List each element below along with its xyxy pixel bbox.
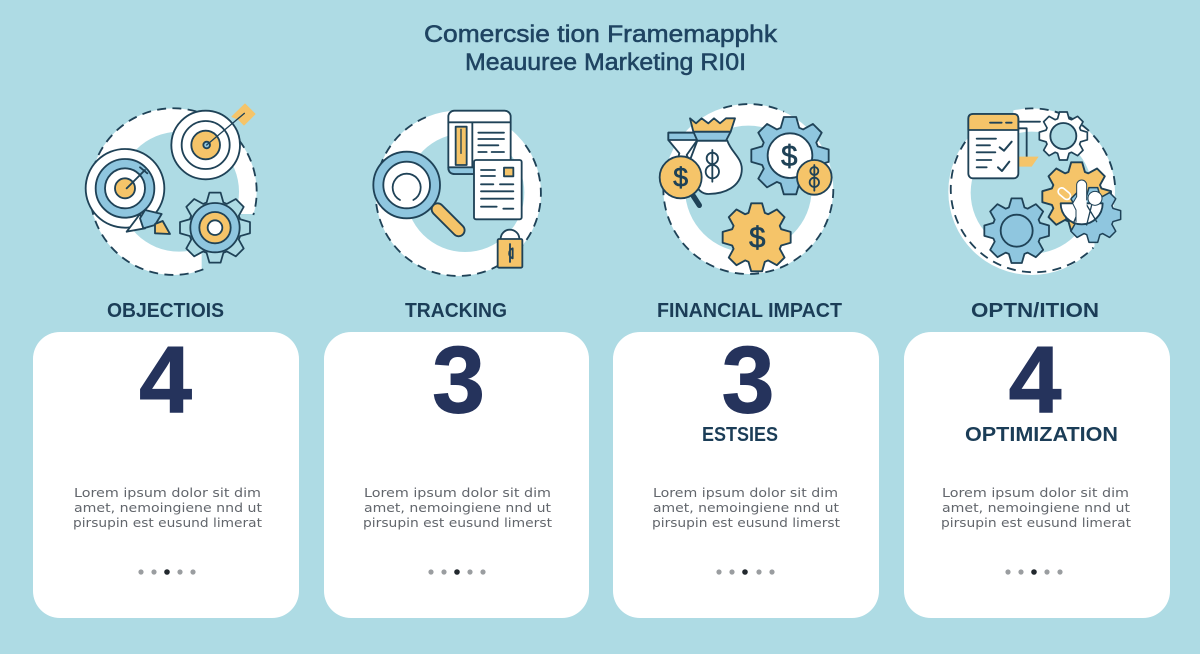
panel: financial impact card: [613, 328, 879, 618]
title: [424, 21, 778, 76]
gear: [180, 193, 250, 263]
title: Meauuree Marketing RI0I: [465, 49, 746, 76]
white gear: [1039, 112, 1087, 160]
body text: amet, nemoingiene nnd ut: [653, 500, 839, 515]
number: 4: [139, 328, 192, 434]
sublabel: ESTSIES: [702, 424, 778, 446]
body text: [941, 485, 1131, 530]
body text: [73, 485, 262, 530]
money bag: back: [668, 133, 697, 175]
target: upper right: [171, 104, 255, 179]
panel: objectives card: [33, 328, 299, 618]
title: Comercsie tion Framemapphk: [424, 21, 778, 48]
blue gear: [984, 198, 1049, 263]
orange gear with dollar: $: [749, 221, 765, 254]
heading: tracking: TRACKING: [405, 300, 507, 322]
sublabel: OPTIMIZATION: [965, 424, 1118, 446]
body text: amet, nemoingiene nnd ut: [74, 500, 262, 515]
pagination dots: [1005, 569, 1063, 575]
pagination dots: [716, 569, 775, 575]
body text: [363, 485, 552, 530]
coin with dollar: [660, 156, 702, 205]
body text: Lorem ipsum dolor sit dim: [74, 485, 261, 500]
gear with dollar: $: [781, 140, 797, 173]
body text: pirsupin est eusund limerat: [941, 515, 1131, 530]
icon: checklist and gears: [945, 107, 1133, 275]
pagination dots: [138, 569, 196, 575]
pagination dots: [428, 569, 486, 575]
checklist: [968, 114, 1040, 178]
heading: financial impact: FINANCIAL IMPACT: [657, 300, 842, 322]
orange and blue gears with hand: [1042, 162, 1121, 242]
icon: targets and gear: [86, 104, 268, 280]
panel: optimization card: [904, 328, 1170, 618]
magnifier: [373, 152, 467, 239]
gear with dollar: [751, 117, 832, 195]
number: 4: [1009, 328, 1062, 434]
icon: magnifier and documents: [373, 111, 541, 276]
body text: pirsupin est eusund limerat: [73, 515, 262, 530]
coin with dollar: $: [673, 163, 688, 193]
icon: price tag bag: [498, 230, 522, 268]
body text: Lorem ipsum dolor sit dim: [942, 485, 1129, 500]
body text: pirsupin est eusund limerst: [652, 515, 840, 530]
heading: optimization: OPTN/ITION: [971, 300, 1099, 322]
document: back: [448, 111, 511, 174]
body text: amet, nemoingiene nnd ut: [364, 500, 551, 515]
body text: pirsupin est eusund limerst: [363, 515, 552, 530]
body text: [652, 485, 840, 530]
panel: tracking card: [324, 328, 589, 618]
body text: Lorem ipsum dolor sit dim: [653, 485, 838, 500]
number: 3: [722, 328, 774, 434]
heading: objectives: OBJECTIOIS: [107, 300, 224, 322]
number: 3: [432, 328, 485, 434]
document: front: [474, 160, 522, 219]
icon: money bags and gears: [660, 104, 833, 274]
orange gear with dollar: [723, 203, 791, 271]
body text: Lorem ipsum dolor sit dim: [364, 485, 551, 500]
target: left with arrow: [86, 149, 170, 234]
money bag: front: [690, 118, 742, 194]
body text: amet, nemoingiene nnd ut: [942, 500, 1130, 515]
